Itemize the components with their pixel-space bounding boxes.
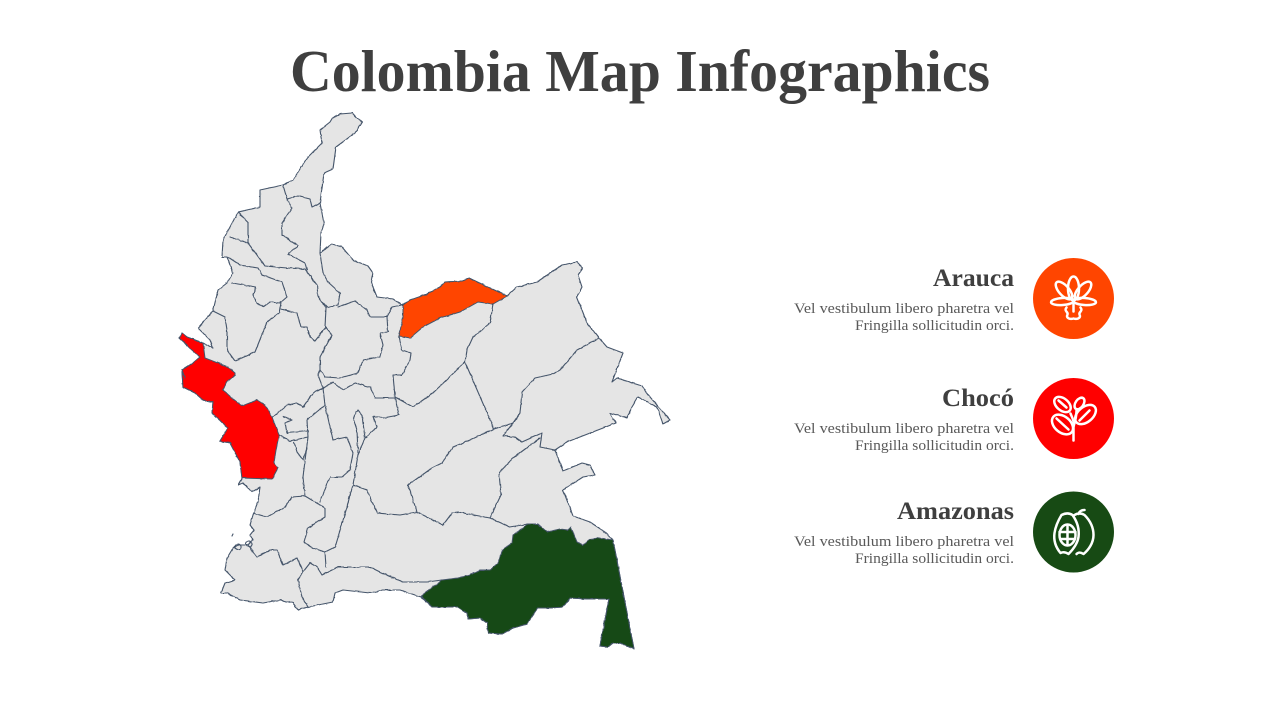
region: Amazonas <box>421 524 634 649</box>
heading: Arauca: Arauca <box>933 265 1015 292</box>
legend item: Amazonas <box>794 492 1114 572</box>
icon: flower <box>1033 258 1114 339</box>
legend item: Chocó <box>794 378 1114 459</box>
text: Amazonas description: Fringilla sollicitudin orci. <box>855 551 1014 567</box>
text: Amazonas description <box>794 534 1014 567</box>
region: Arauca <box>399 278 507 338</box>
text: Chocó description <box>794 421 1014 454</box>
text: Arauca description: Fringilla sollicitudin orci. <box>855 318 1014 334</box>
legend item: Arauca <box>794 258 1114 339</box>
map of Colombia <box>179 113 670 649</box>
text: Chocó description: Vel vestibulum libero pharetra vel <box>794 421 1014 437</box>
text: Arauca description: Vel vestibulum libero pharetra vel <box>794 301 1014 317</box>
region: Chocó <box>179 333 279 485</box>
text: Amazonas description: Vel vestibulum libero pharetra vel <box>794 534 1014 550</box>
title: Colombia Map Infographics <box>290 38 990 104</box>
icon: leaves <box>1033 378 1114 459</box>
icon: papaya <box>1033 492 1114 572</box>
heading: Chocó: Chocó <box>942 385 1014 412</box>
text: Chocó description: Fringilla sollicitudin orci. <box>855 438 1014 454</box>
text: Arauca description <box>794 301 1014 334</box>
heading: Amazonas: Amazonas <box>897 498 1014 525</box>
map base: grey departments <box>179 113 670 649</box>
